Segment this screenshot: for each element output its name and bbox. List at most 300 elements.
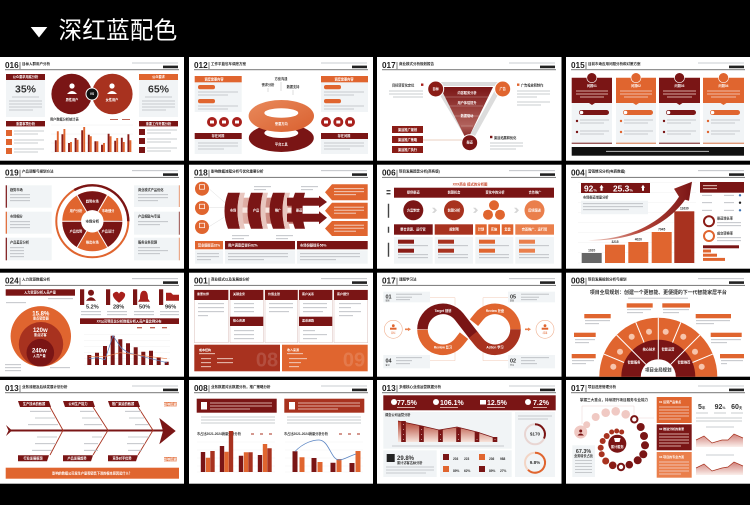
banner left: 人力资源分析人员产量 (24, 290, 57, 295)
metric 2: 用户满意度提升82% (228, 242, 258, 248)
header (571, 277, 745, 286)
legend (137, 327, 167, 329)
growth arrow (588, 182, 692, 240)
summary bar (572, 147, 744, 156)
header (5, 384, 179, 393)
stacked rings (249, 100, 314, 152)
header: 017 (382, 61, 396, 70)
callouts right (662, 303, 744, 358)
header: 024 (5, 277, 19, 286)
banner left (6, 289, 75, 296)
nested circles: 120w (33, 328, 48, 334)
left boxes: 渠道推广策略 (398, 137, 418, 142)
ring labels: 方案沟通 (275, 76, 288, 81)
bar row: 复盘 (504, 227, 511, 232)
KPI banner (383, 395, 556, 410)
right chart: 市占比2021-2024销量分析分析 (284, 431, 329, 436)
header: 001 (194, 277, 208, 286)
header (382, 384, 556, 393)
header: 商业模式分析规划报告 (399, 61, 434, 66)
panel: 008 fan (566, 273, 750, 377)
header: 012 (194, 61, 208, 70)
small labels: 影响因素 (164, 456, 177, 461)
column header labels: 客户细分 (337, 291, 349, 296)
node circles: 广告 (500, 86, 506, 91)
panel: 017 spiral (566, 380, 750, 484)
panel: 016 user analysis (0, 57, 184, 161)
text card 2 (657, 424, 692, 450)
circles row: 前期分析 (448, 207, 461, 212)
stacked rings: 需要方向 (275, 121, 288, 126)
metric 3: 市场份额提升56% (300, 242, 326, 248)
right arrow (525, 328, 531, 331)
small labels: 影响因素 (164, 401, 177, 406)
bottom banner: 影响的数据公司发生产量和销售下滑的根本原因是什么？ (52, 470, 132, 475)
side bars (703, 245, 739, 261)
KPI banner: 77.5% (397, 400, 418, 407)
right text: 广告投放和制作 (521, 82, 544, 88)
drums: 产品 (253, 208, 259, 213)
header: 013 (382, 384, 396, 393)
left arrow (405, 328, 411, 331)
wheel chart: 市场细分 (102, 208, 115, 213)
bottom banner (6, 468, 179, 479)
nested circles: 人员产量 (33, 353, 46, 358)
header: 影响数据流程分析与优化重要分析 (211, 169, 264, 174)
center badge (608, 435, 626, 453)
bottom block orange: 收入来源 (287, 347, 299, 352)
circles row: 后续跟进 (528, 207, 542, 212)
panel: 001 canvas (189, 273, 373, 377)
wheel chart: 市场分析 (86, 218, 100, 223)
label text: 生产技术的瓶颈 (23, 401, 46, 406)
bars: 4020 (635, 238, 642, 242)
right node (536, 320, 554, 338)
panel: 024 staff analysis (0, 273, 184, 377)
header (194, 384, 368, 393)
area chart 2 (696, 455, 743, 475)
header (382, 169, 556, 178)
KPI 2: 28% (113, 305, 124, 311)
drums: 渠道 (296, 208, 303, 213)
right card: 65% (139, 74, 178, 117)
right bottom card (321, 133, 368, 154)
fan chart: 核心技术 (643, 347, 656, 352)
KPI banner: 25.3% (613, 183, 633, 193)
KPI 4 (159, 289, 179, 315)
header: 人力资源数据分析 (22, 277, 50, 282)
stats: 92% (715, 404, 725, 411)
top banner: 合作推广 (529, 190, 541, 195)
wheel chart: 产品设计 (102, 229, 115, 234)
detail cards (394, 237, 554, 264)
bottom text: 渠道拓展和优化 (494, 135, 517, 140)
header: 营销情况分析(电商数据) (588, 169, 625, 174)
stats: 5年 (698, 404, 706, 411)
funnel (440, 87, 493, 141)
header: 008 (194, 384, 208, 393)
fan chart: 项目全局规划 (645, 367, 672, 374)
funnel: 数据驱动 (461, 113, 474, 118)
mini metrics: 89% (489, 469, 496, 473)
left boxes: 渠道推广规划 (398, 127, 417, 132)
label text: 行业发展瓶颈 (23, 456, 43, 460)
top banner: 前期机会 (448, 190, 461, 195)
circles row: 方案制定 (407, 207, 420, 212)
column 3 (659, 73, 700, 144)
bar row (394, 224, 554, 235)
KPI 3: 50% (139, 305, 150, 311)
panel: 019 wheel (0, 165, 184, 269)
side panel: 成交转换率 (717, 231, 734, 236)
left cards: 市场细分 (10, 214, 24, 219)
header: 多维核心业绩运营数据分析 (399, 384, 441, 389)
left top card (195, 76, 242, 112)
bars: 7045 (658, 228, 665, 232)
right card: 65%: 65% (148, 84, 170, 96)
stat card: 业务增长占比 (574, 453, 594, 458)
column header labels: 价值主张 (268, 291, 280, 296)
header: 项目发展规划分析与规划 (588, 277, 627, 282)
stat card (572, 445, 595, 477)
panel: 017 infinity (377, 273, 562, 377)
node circles: 目标 (433, 86, 440, 91)
card 02 (508, 355, 555, 368)
funnel: 用户体验提升 (457, 100, 477, 105)
top banner (394, 188, 554, 198)
side panel donuts: $170 (530, 432, 541, 436)
fan chart (599, 318, 717, 377)
side panel donuts: 9.8% (530, 460, 540, 465)
header: 008 (571, 277, 585, 286)
ring labels: 需求分析 (262, 82, 275, 87)
KPI 1: 5.2% (86, 305, 99, 311)
left card: 35%: 公众要求用底分析 (13, 74, 39, 79)
header: 工作平蓝包车调度方案 (211, 61, 246, 66)
left node (384, 320, 402, 338)
side labels (386, 191, 390, 257)
right top card (321, 76, 368, 112)
header: 006 (382, 169, 396, 178)
right cards: 商业模式产品优化 (138, 187, 164, 192)
column 2: 问题02 (631, 83, 641, 88)
callout right (284, 399, 364, 413)
bars (582, 207, 694, 263)
bars: 11630 (680, 207, 689, 211)
stat card: 67.3% (576, 449, 591, 455)
wheel chart: 推出市场 (86, 240, 99, 245)
spine (6, 418, 176, 444)
ring labels (262, 76, 300, 95)
right node: 成果 (543, 331, 548, 335)
bottom block red: 成本结构 (199, 347, 211, 352)
mini metrics: 27% (500, 469, 507, 473)
banner right (80, 318, 179, 324)
bar row: 规划项 (449, 227, 460, 232)
header: 产品调整与规划方法 (22, 169, 54, 174)
nested circles: 重点销售额 (33, 316, 50, 321)
venn circles: 男性用户 (66, 97, 78, 102)
side panel donuts (515, 412, 555, 477)
panel: 013 dashboard (377, 380, 562, 484)
top banner: 提供渠道 (407, 190, 420, 195)
card 01: 01 (386, 295, 392, 301)
paragraph lines (201, 417, 361, 423)
column body lines (198, 304, 361, 339)
wheel chart: 趋势市场 (86, 199, 99, 204)
text block (581, 195, 648, 214)
header: 004 (571, 169, 585, 178)
title icon: white triangle (31, 27, 47, 38)
header: 013 (5, 384, 19, 393)
title: 深红蓝配色 (58, 18, 177, 44)
card 02: 学习 (510, 363, 514, 367)
card 05: 05 (510, 295, 516, 301)
area chart (383, 412, 512, 449)
loop labels (434, 308, 505, 350)
metric 1: 营业额提高32% (198, 242, 220, 247)
loop labels: Target 规划 (435, 308, 451, 313)
header (571, 384, 745, 393)
fan chart: 智能运营 (662, 347, 675, 352)
KPI banner: 12.5% (487, 400, 508, 407)
label text: 产品发展趋势 (67, 456, 87, 460)
left text: 目标转变化定位 (392, 82, 415, 88)
drums (224, 193, 305, 229)
stacked rings: 平台工具 (275, 142, 288, 146)
panel: 015 four columns (566, 57, 750, 161)
bar chart: 用户数据分析统计表 (50, 116, 79, 122)
KPI banner (581, 183, 650, 193)
column header labels (197, 291, 349, 323)
wheel chart: 用户分析 (70, 208, 83, 213)
outline (582, 406, 654, 424)
header: 业务数据对比数据分析，推广策略分析 (211, 384, 271, 389)
KPI 1 (80, 289, 101, 315)
label text: 竞争对手优势 (112, 456, 132, 460)
header (5, 61, 179, 70)
triangle frame (435, 82, 501, 145)
bar row: 计划 (478, 227, 484, 232)
grid (578, 183, 696, 263)
header: 018 (194, 169, 208, 178)
right list (139, 121, 178, 153)
card 05 (508, 292, 555, 303)
column header labels: 客户关系 (302, 291, 314, 296)
column 4 (703, 73, 744, 144)
KPI 4: 96% (165, 305, 176, 311)
column headers (194, 290, 368, 326)
header: 课题学习法 (399, 277, 417, 282)
bottom block red: 08 (256, 350, 278, 372)
top banner: 变化中的分析 (485, 190, 505, 195)
header: 项目进度管理分析 (588, 384, 616, 389)
bottom block red (194, 345, 280, 372)
KPI banner: 7.2% (533, 400, 550, 407)
label text (23, 401, 135, 460)
metric 2 (225, 241, 295, 264)
KPI 2 (106, 289, 127, 315)
left cards: 趋势市场 (10, 187, 24, 192)
callout labels (232, 187, 318, 239)
heading: 掌握三大重点，持续提升项目服务专业能力 (580, 397, 649, 402)
left icon circles (207, 117, 242, 127)
text card 1 (657, 397, 692, 423)
stats: 60天 (731, 404, 743, 411)
metric 1 (195, 241, 223, 264)
nested circles (5, 299, 73, 371)
header: 项目发展趋势分析(商务版) (399, 169, 440, 174)
header (194, 61, 368, 70)
stats (696, 404, 743, 421)
header: 目前市场应用问题分析和对策方案 (588, 61, 641, 66)
text block: 市场渠道增量分析 (583, 195, 609, 200)
nested circles: 重点访客 (34, 332, 47, 337)
right cards (134, 185, 180, 260)
subtitle: XXX商业 模式的分析图 (453, 182, 488, 187)
header: 商业模式以及发展前分析 (211, 277, 250, 282)
header (5, 169, 179, 178)
right cards: 产品细致与专属 (138, 214, 160, 219)
right list: 重要工作开展分析 (146, 121, 172, 126)
column header labels: 核心资源 (233, 318, 245, 323)
column 1 (572, 73, 612, 144)
area chart 1 (696, 427, 743, 447)
funnel: 内容服务分析 (457, 90, 477, 95)
arrows (287, 196, 327, 224)
header: 017 (571, 384, 585, 393)
left card: 35%: 35% (15, 84, 37, 96)
left chart (197, 431, 275, 472)
mini metrics: 89% (453, 469, 460, 473)
column 1: 问题01 (587, 83, 597, 88)
metric 3 (297, 241, 368, 264)
left boxes: 渠道推广执行 (398, 147, 418, 152)
column 3: 问题03 (675, 83, 685, 88)
mini metrics (440, 450, 512, 477)
left bottom card: 存在问题 (212, 133, 225, 138)
summary card: 29.8% (397, 456, 415, 462)
wheel chart (56, 185, 128, 257)
nested circles: 240w (32, 349, 47, 355)
twig lines (28, 411, 150, 450)
infinity loop (422, 309, 516, 350)
mini metrics: 223 (464, 457, 470, 461)
top labels (18, 401, 140, 461)
bar row: 完善推广、运行管 (522, 227, 548, 232)
right card: 65%: 公众要求 (152, 74, 166, 79)
bottom text (490, 135, 523, 149)
dark beads (598, 416, 649, 470)
bar row: 整合资源、运行管 (400, 227, 427, 232)
label text: 推广渠道的瓶颈 (112, 401, 135, 406)
text card 1: 01 运营产品重点 (659, 399, 681, 404)
header (194, 277, 368, 286)
nested circles: 15.8% (32, 312, 50, 318)
text card 2: 02 推进分析的重要 (659, 426, 684, 431)
panel: 004 growth chart (566, 165, 750, 269)
panel: 017 funnel triangle (377, 57, 562, 161)
area chart: 调查公司运营分析 (385, 412, 411, 417)
left list: 重要事项分析 (16, 121, 36, 126)
side panel (700, 182, 744, 241)
fan chart: 智能推荐 (678, 360, 691, 365)
column outlines (194, 290, 368, 343)
header: 019 (5, 169, 19, 178)
pale beads (574, 407, 630, 438)
panel: 013 fishbone (0, 380, 184, 484)
card 01: 规划 (386, 299, 390, 303)
left chart: 市占比2021-2024销量分析分析 (197, 431, 242, 436)
fan title (590, 289, 727, 298)
left bottom card (195, 133, 242, 154)
header (194, 169, 368, 178)
header: 目标人群用户分析 (22, 61, 50, 66)
bar row: 实施 (491, 227, 498, 232)
small labels (164, 401, 177, 461)
card 05: 复盘 (510, 299, 514, 303)
bar chart (50, 116, 133, 152)
pipeline bands (233, 198, 295, 224)
header (382, 277, 556, 286)
column 4: 问题04 (719, 83, 729, 88)
node circles: 渠道 (467, 140, 474, 145)
banner right: XX公司项目总分析数据分析人员产量比例分布 (97, 318, 162, 323)
card 04: 04 (386, 359, 393, 365)
loop labels: Action 学习 (486, 345, 504, 350)
left node: 目标 (391, 331, 396, 335)
callout left (197, 399, 277, 413)
drums: 市场 (230, 208, 237, 213)
column 2 (616, 73, 656, 144)
center badge: 累计服务 (611, 444, 624, 449)
bars: 1020 (588, 249, 595, 253)
left list (6, 121, 45, 154)
right bottom card: 存在问题 (338, 133, 351, 138)
card 01 (383, 292, 430, 303)
header: 业务流程及后续发展计划分析 (22, 384, 68, 389)
bottom block orange (282, 345, 368, 372)
header (571, 61, 745, 70)
loop labels: Review 复习 (434, 345, 452, 350)
left top card: 调度需要内容 (204, 76, 224, 82)
callouts left (572, 303, 653, 358)
combo chart (84, 335, 170, 365)
drums: 推广 (275, 208, 281, 213)
ring labels: 数据支持 (287, 84, 300, 89)
bones (50, 407, 153, 455)
card 04: 复习 (386, 363, 390, 367)
fan chart: 智能服务 (628, 360, 641, 365)
KPI banner: 106.1% (440, 400, 465, 407)
text card 3 (657, 452, 692, 478)
text card 3: 03 项目的专业方案 (659, 454, 684, 459)
summary card: 累计访客达标分析 (397, 460, 423, 465)
left card: 35% (6, 74, 45, 117)
venn circles (51, 74, 133, 114)
panel: 018 pipeline (189, 165, 373, 269)
fan title: 项目全局规划：创建一个更智能、更便捷的下一代智能家居平台 (590, 289, 727, 296)
label text: 公司生产能力 (68, 401, 88, 406)
KPI banner: 92% (584, 183, 597, 193)
column header labels: 关键业务 (233, 291, 245, 296)
header: 016 (5, 61, 19, 70)
mini metrics: 203 (453, 457, 459, 461)
wheel chart: 产品优势 (70, 229, 83, 234)
header (5, 277, 179, 286)
panel: 006 business model (377, 165, 562, 269)
card 04 (383, 355, 430, 368)
